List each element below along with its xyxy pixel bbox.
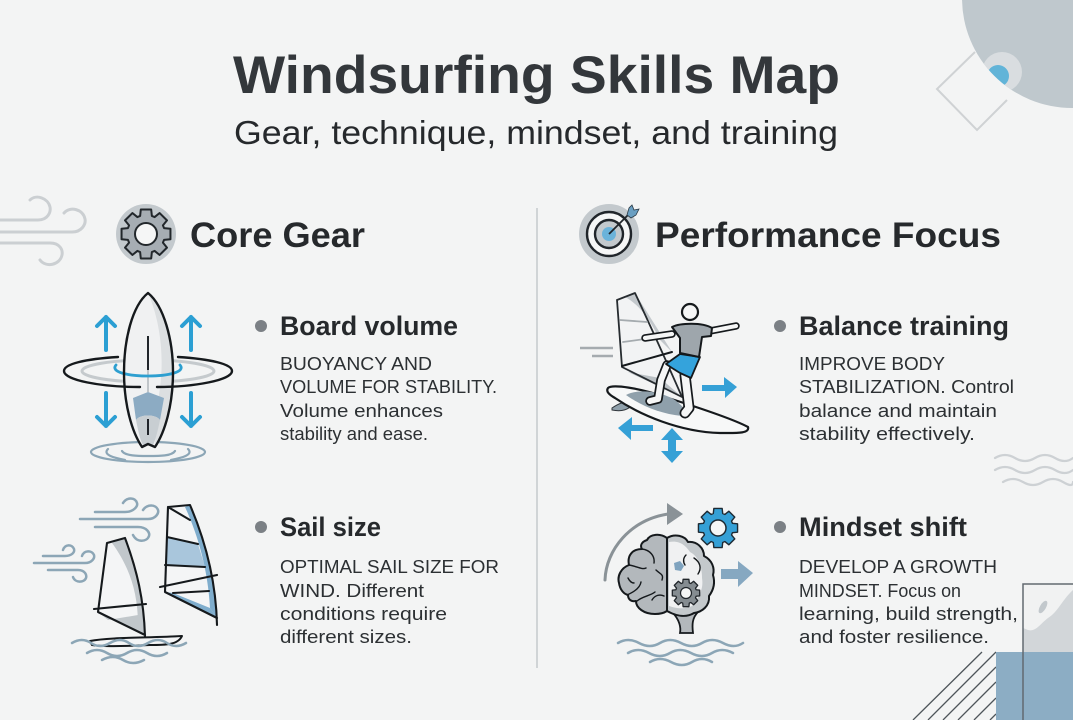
- text: board volume: [255, 311, 497, 444]
- text: balance training: [774, 311, 1014, 444]
- text: board volume: Volume enhances: [280, 400, 443, 421]
- text: sail size: [255, 512, 499, 647]
- icon: sail size: [34, 498, 217, 663]
- icon: gear badge: [116, 204, 176, 264]
- text: mindset shift: DEVELOP A GROWTH: [799, 556, 997, 577]
- text: balance training: IMPROVE BODY: [799, 353, 945, 374]
- subtitle: Gear, technique, mindset, and training: [234, 114, 838, 151]
- text: board volume: VOLUME FOR STABILITY.: [280, 376, 497, 397]
- decoration: waves right: [995, 455, 1073, 485]
- text: balance training: STABILIZATION. Control: [799, 376, 1014, 397]
- text: mindset shift: learning, build strength,: [799, 603, 1018, 624]
- text: sail size: OPTIMAL SAIL SIZE FOR: [280, 556, 499, 577]
- text: mindset shift: Mindset shift: [799, 512, 967, 542]
- heading: core gear: Core Gear: [190, 216, 365, 255]
- text: sail size: Sail size: [280, 512, 381, 542]
- text: mindset shift: MINDSET. Focus on: [799, 580, 961, 601]
- text: sail size: WIND. Different: [280, 580, 424, 601]
- text: mindset shift: and foster resilience.: [799, 626, 989, 647]
- title: Windsurfing Skills Map: [233, 46, 840, 105]
- text: balance training: Balance training: [799, 311, 1009, 341]
- panel: performance focus: [579, 204, 1018, 665]
- text: sail size: conditions require: [280, 603, 447, 624]
- icon: board volume: [64, 293, 232, 462]
- text: balance training: stability effectively.: [799, 423, 975, 444]
- text: board volume: BUOYANCY AND: [280, 353, 432, 374]
- decoration: wind swirls left: [0, 197, 85, 265]
- decoration: bottom-right shapes: [913, 584, 1073, 720]
- text: sail size: different sizes.: [280, 626, 412, 647]
- decoration: top-right circle and diamond: [937, 0, 1073, 130]
- text: board volume: stability and ease.: [280, 423, 428, 444]
- text: board volume: Board volume: [280, 311, 458, 341]
- text: mindset shift: [774, 512, 1018, 647]
- icon: target badge: [579, 204, 639, 264]
- heading: performance focus: Performance Focus: [655, 216, 1001, 255]
- text: balance training: balance and maintain: [799, 400, 997, 421]
- center divider: [536, 208, 538, 668]
- panel: core gear: [34, 204, 499, 663]
- icon: mindset shift: [605, 503, 753, 665]
- icon: balance training: [580, 293, 748, 463]
